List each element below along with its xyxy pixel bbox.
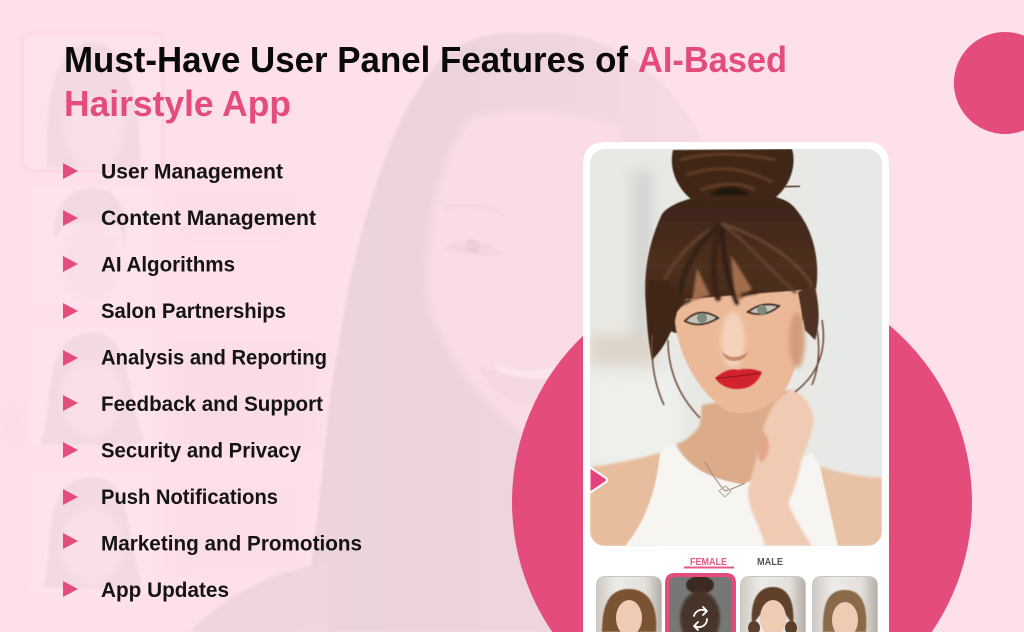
ghost background portrait [192, 33, 668, 632]
title: Hairstyle App [64, 83, 291, 124]
tab female: FEMALE [690, 557, 727, 568]
tab male: MALE [757, 557, 783, 568]
item: Marketing and Promotions: Marketing and Promotions [101, 532, 362, 556]
feature list [63, 160, 362, 602]
lips [715, 369, 762, 389]
item: Content Management: Content Management [101, 207, 316, 230]
hand [748, 390, 813, 546]
portrait photo [590, 149, 882, 546]
bun [672, 149, 794, 202]
ghost smile [478, 358, 582, 405]
side hair [647, 280, 686, 360]
white top [625, 443, 838, 546]
title: AI-Based [638, 39, 787, 80]
slider arrow on phone [589, 468, 607, 492]
thumbnail 4 [812, 576, 878, 632]
item: Feedback and Support: Feedback and Support [101, 393, 323, 416]
thumbnail 3 [740, 576, 806, 632]
thumbnail 1 [596, 576, 662, 632]
gender tabs [684, 557, 783, 568]
necklace [705, 462, 745, 491]
loose strands [652, 320, 823, 418]
item: Salon Partnerships: Salon Partnerships [101, 300, 286, 323]
item: Security and Privacy: Security and Privacy [101, 440, 301, 462]
icon: refresh [694, 607, 707, 630]
ghost eye [444, 240, 504, 255]
ghost card 3 [30, 326, 154, 446]
ghost card 1 [22, 33, 163, 171]
ear [809, 286, 818, 300]
title [64, 39, 787, 124]
shoulders [590, 452, 662, 546]
item: AI Algorithms: AI Algorithms [101, 254, 235, 276]
item: Push Notifications: Push Notifications [101, 486, 278, 509]
item: Analysis and Reporting: Analysis and Reporting [101, 346, 327, 370]
decorative circle top right [954, 32, 1024, 134]
phone mockup [583, 142, 889, 632]
thumbnail 2 selected with refresh icon [665, 573, 736, 632]
title: Must-Have User Panel Features of [64, 39, 629, 80]
phone frame [583, 142, 889, 632]
ghost thumbnail cards [22, 33, 163, 592]
back hair [645, 193, 817, 340]
large pink circle behind phone [512, 272, 972, 632]
item: App Updates: App Updates [101, 579, 229, 602]
face [674, 290, 802, 413]
neck [676, 390, 790, 488]
nose shadow [722, 352, 748, 361]
bangs strands [654, 224, 812, 315]
item: User Management: User Management [101, 160, 283, 184]
ghost card 4 [30, 468, 154, 592]
ghost card 2 [30, 186, 154, 306]
forehead gaps [731, 255, 752, 300]
eyes [685, 313, 718, 324]
thumbnail row [596, 573, 878, 632]
